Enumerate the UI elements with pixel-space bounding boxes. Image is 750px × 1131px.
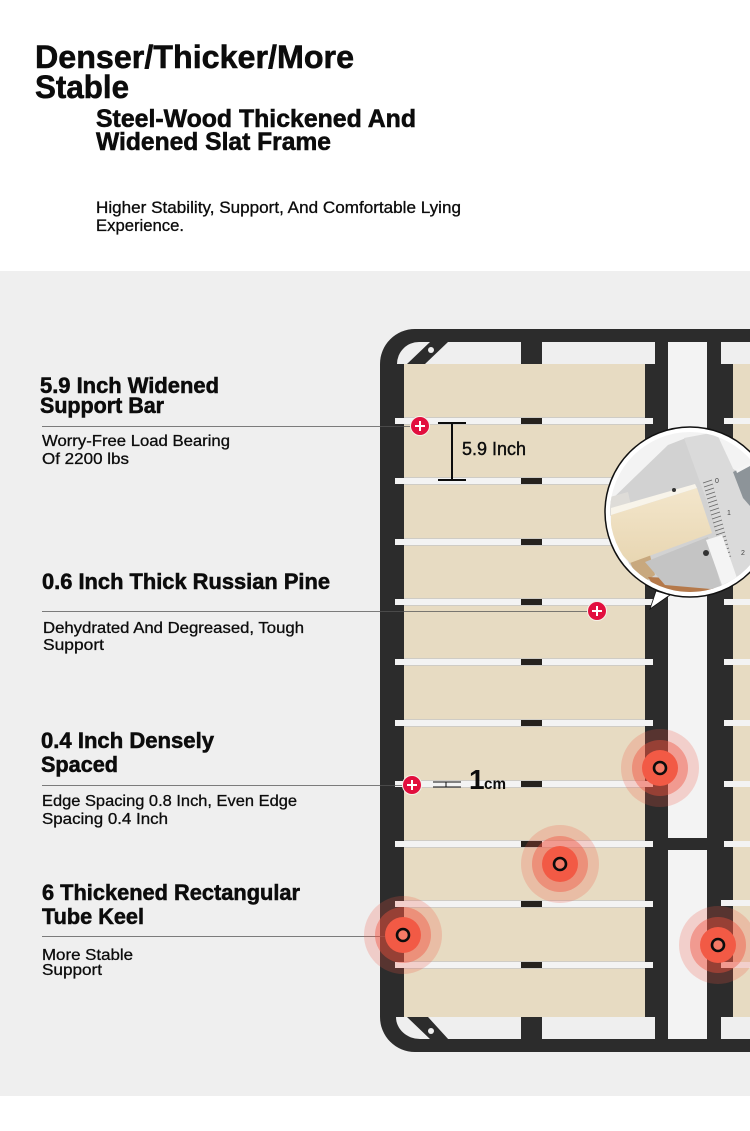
feature: russian pine: Dehydrated And Degreased, Tough xyxy=(43,620,304,637)
caliper photo xyxy=(610,432,750,592)
intro description xyxy=(96,199,461,235)
dimension: 1 cm xyxy=(433,764,506,795)
feature: widened support bar: Support Bar xyxy=(40,393,164,418)
feature: densely spaced: Edge Spacing 0.8 Inch, Even Edge xyxy=(42,793,297,810)
feature: rectangular tube keel: Tube Keel xyxy=(42,904,144,929)
marker: plus 3 xyxy=(402,776,422,794)
intro description: Higher Stability, Support, And Comfortable Lying xyxy=(96,199,461,217)
feature: rectangular tube keel: Support xyxy=(42,962,103,979)
marker: plus 2 xyxy=(588,602,606,620)
wood slats right xyxy=(733,364,750,1017)
main title: Denser/Thicker/More xyxy=(35,39,354,75)
slat gaps xyxy=(395,417,750,969)
feature: densely spaced: 0.4 Inch Densely xyxy=(41,728,215,753)
subtitle xyxy=(96,105,416,156)
dimension: 5.9 inch: 5.9 Inch xyxy=(462,438,526,459)
main title xyxy=(35,39,354,105)
pine slat sample xyxy=(611,488,712,563)
gray panel background xyxy=(0,271,750,1096)
feature: widened support bar xyxy=(40,373,230,468)
feature: widened support bar: Worry-Free Load Bearing xyxy=(42,433,230,450)
feature: russian pine: 0.6 Inch Thick Russian Pine xyxy=(42,569,330,594)
ruler digits: 2 xyxy=(741,550,745,557)
callout lens: caliper measuring slat xyxy=(600,427,750,609)
lens border xyxy=(605,427,750,597)
ruler digits xyxy=(715,478,745,557)
wood slats left xyxy=(404,364,645,1017)
frame openings xyxy=(396,342,750,1039)
feature: russian pine: Support xyxy=(43,637,105,654)
bed frame illustration xyxy=(380,329,750,1052)
feature: rectangular tube keel xyxy=(42,880,300,979)
dimension: 1 cm: cm xyxy=(484,776,506,793)
ruler digits: 1 xyxy=(727,510,731,517)
leader lines xyxy=(42,426,590,936)
feature: widened support bar: 5.9 Inch Widened xyxy=(40,373,219,398)
steel frame xyxy=(380,329,750,1052)
feature: widened support bar: Of 2200 lbs xyxy=(42,451,129,468)
feature: rectangular tube keel: More Stable xyxy=(42,947,133,964)
centre gap xyxy=(668,342,707,1039)
ruler ticks xyxy=(703,480,731,559)
feature: russian pine xyxy=(42,569,330,654)
feature: densely spaced xyxy=(41,728,297,828)
ruler digits: 0 xyxy=(715,478,719,485)
lens tail xyxy=(650,591,670,609)
intro description: Experience. xyxy=(96,217,184,235)
keel target 3 xyxy=(364,896,442,974)
main title: Stable xyxy=(35,69,129,105)
header text block xyxy=(35,39,461,235)
keel target 4 xyxy=(679,906,750,984)
sliding jaw xyxy=(645,537,722,590)
dimension: 5.9 inch xyxy=(438,423,526,480)
corner brackets xyxy=(407,342,449,1040)
dimension: 1 cm: 1 xyxy=(469,764,485,795)
feature: densely spaced: Spacing 0.4 Inch xyxy=(42,811,168,828)
subtitle: Steel-Wood Thickened And xyxy=(96,105,416,133)
caliper ruler xyxy=(684,434,733,468)
feature: rectangular tube keel: 6 Thickened Rectangular xyxy=(42,880,300,905)
feature: densely spaced: Spaced xyxy=(41,752,118,777)
marker: plus 1 xyxy=(410,416,430,436)
vernier scale xyxy=(706,535,737,585)
keel target 1 xyxy=(621,729,699,807)
subtitle: Widened Slat Frame xyxy=(96,128,331,156)
keel target 2 xyxy=(521,825,599,903)
